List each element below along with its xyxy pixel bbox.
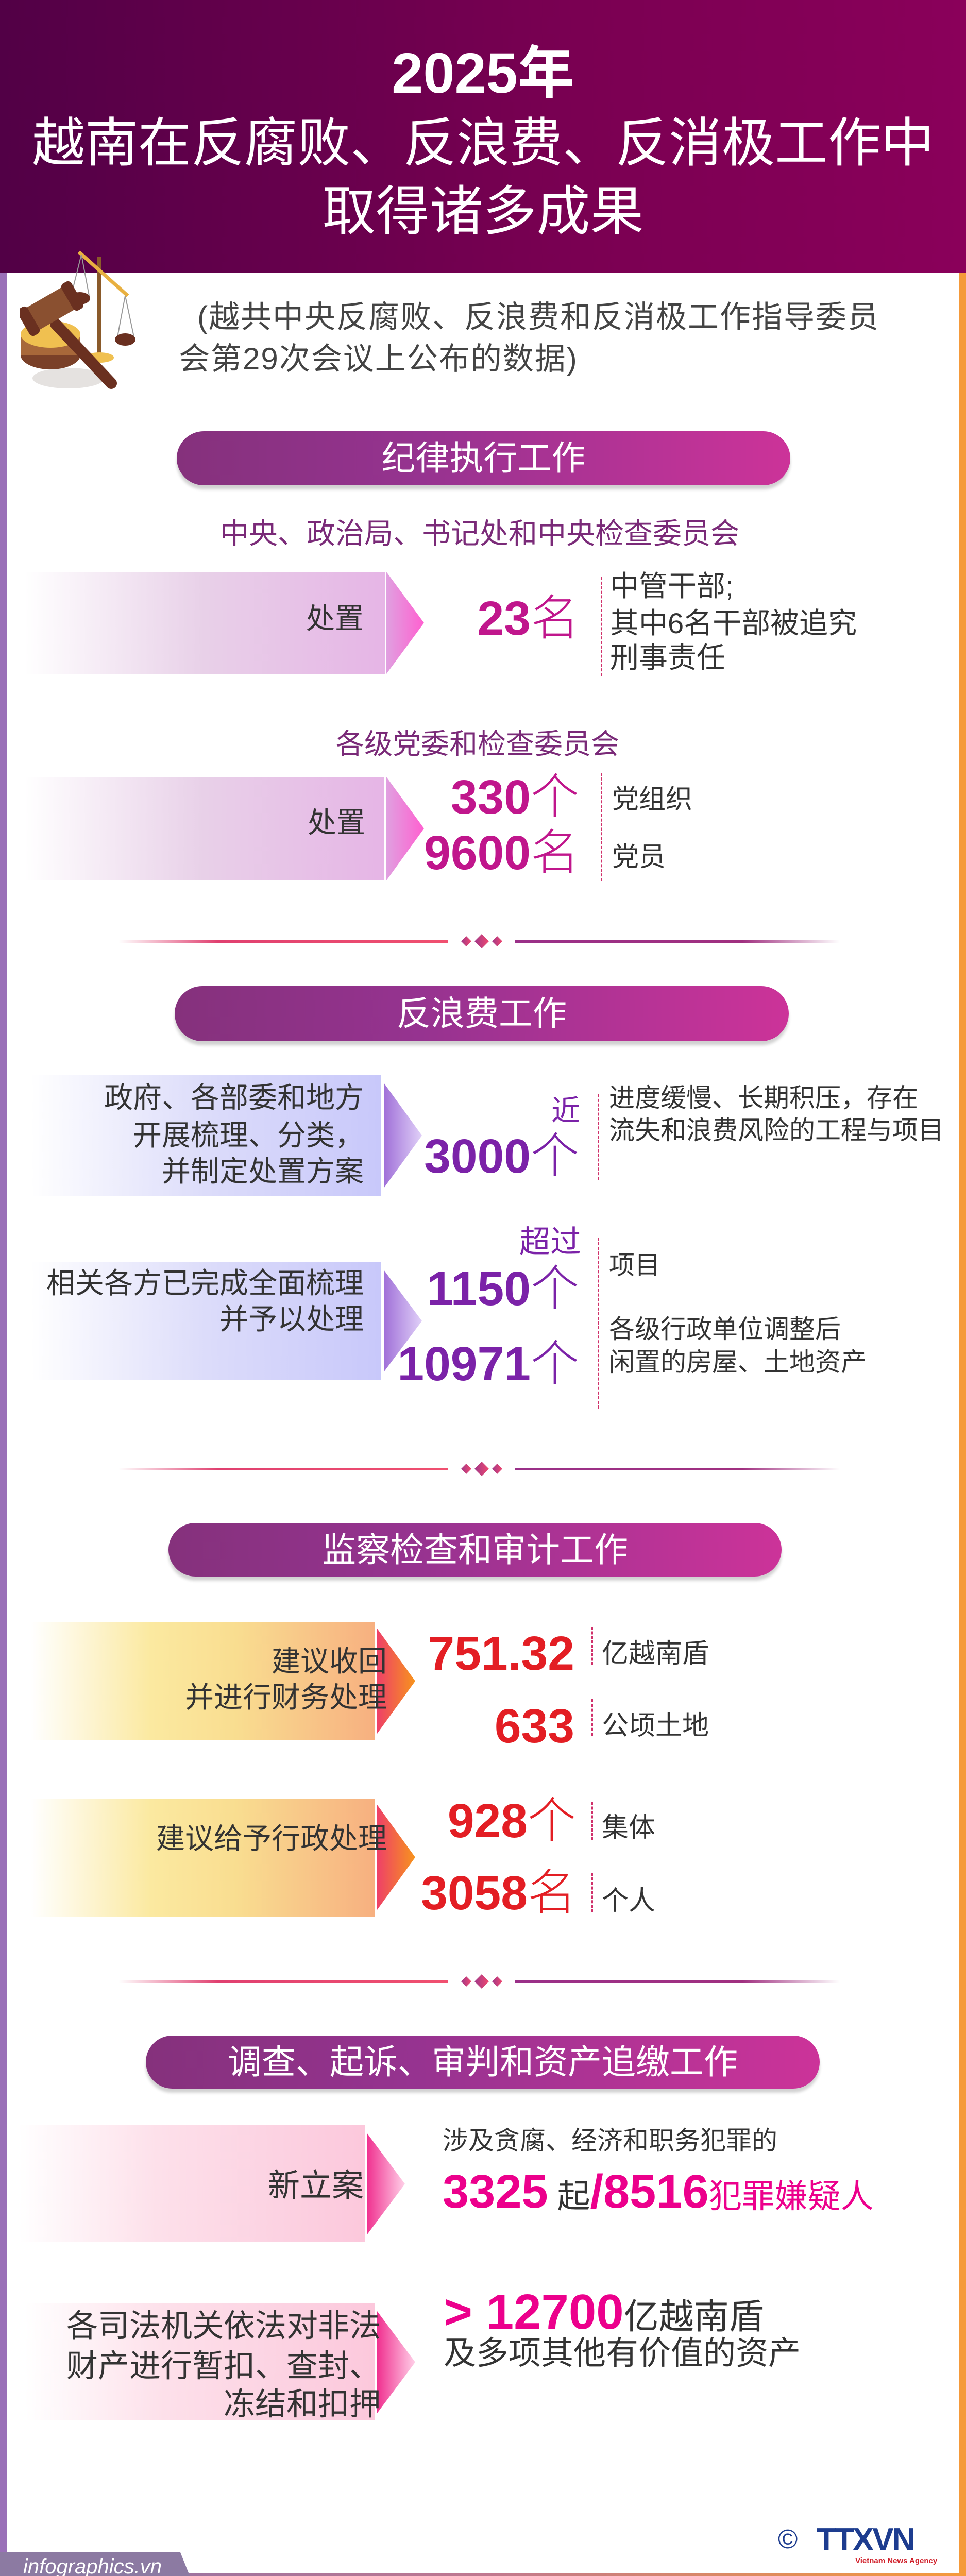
number 3000个: 3000个	[424, 1129, 579, 1183]
divider	[123, 1974, 836, 1989]
footer strip	[0, 2573, 966, 2576]
title line 1: 2025年	[392, 42, 574, 105]
panel: discipline row 1: 刑事责任	[610, 641, 725, 674]
panel: inspection row D: 建议给予行政处理	[156, 1822, 387, 1855]
panel: inspection row D: 个人	[602, 1886, 655, 1916]
logo: TTXVN	[778, 2522, 938, 2565]
logo: TTXVN: ©	[778, 2524, 798, 2554]
heading: 监察检查和审计工作: 监察检查和审计工作	[322, 1531, 628, 1569]
number 23名: 23名	[478, 591, 579, 645]
subtitle	[179, 300, 879, 376]
panel: asset seizure: 各司法机关依法对非法	[66, 2308, 381, 2343]
subheading: central level: 中央、政治局、书记处和中央检查委员会	[220, 517, 739, 550]
number 1150个: 1150个	[427, 1261, 579, 1315]
panel: new cases	[55, 2125, 874, 2242]
panel: waste row A: 近	[551, 1094, 580, 1127]
panel: inspection row D: 集体	[602, 1813, 655, 1843]
panel: asset seizure: 财产进行暂扣、查封、	[66, 2348, 381, 2383]
title line 2: 越南在反腐败、反浪费、反消极工作中	[32, 113, 934, 173]
subheading: all levels: 各级党委和检查委员会	[336, 728, 619, 760]
subtitle: (越共中央反腐败、反浪费和反消极工作指导委员	[197, 300, 879, 334]
number 9600名: 9600名	[424, 825, 579, 879]
panel: inspection row C: 亿越南盾	[602, 1639, 709, 1669]
panel: waste row A: 进度缓慢、长期积压，存在	[609, 1083, 918, 1112]
number >12700: > 12700亿越南盾	[444, 2284, 764, 2340]
divider	[123, 1462, 836, 1476]
panel: waste row A: 并制定处置方案	[162, 1155, 364, 1188]
panel: discipline row 2: 党员	[612, 842, 666, 872]
panel: waste row A	[72, 1075, 944, 1196]
panel: discipline row 1: 中管干部;	[610, 570, 734, 602]
right side bar	[959, 273, 966, 2576]
footer: infographics.vn	[0, 2552, 192, 2576]
panel: discipline row 2	[56, 770, 692, 881]
panel: waste row B: 相关各方已完成全面梳理	[46, 1267, 364, 1299]
panel: inspection row D	[41, 1793, 655, 1920]
panel: discipline row 2: 党组织	[612, 785, 692, 815]
panel: inspection row C: 公顷土地	[602, 1711, 709, 1741]
heading: 反浪费工作	[175, 986, 789, 1041]
logo: TTXVN: TTXVN	[817, 2522, 913, 2557]
heading: 调查、起诉、审判和资产追缴工作	[146, 2036, 820, 2089]
panel: waste row B: 超过	[519, 1225, 581, 1259]
number 3325/8516: 3325 起/8516犯罪嫌疑人	[443, 2165, 874, 2218]
number 10971个: 10971个	[397, 1336, 579, 1391]
number 633: 633	[495, 1699, 574, 1753]
subtitle: 会第29次会议上公布的数据)	[179, 342, 578, 376]
panel: asset seizure: 冻结和扣押	[224, 2386, 381, 2421]
title line 3: 取得诸多成果	[322, 182, 644, 242]
panel: waste row B: 各级行政单位调整后	[609, 1315, 841, 1344]
heading: 纪律执行工作: 纪律执行工作	[381, 439, 585, 477]
heading: 监察检查和审计工作	[168, 1523, 782, 1577]
panel: asset seizure: 及多项其他有价值的资产	[444, 2335, 801, 2371]
number 928个: 928个	[448, 1793, 576, 1848]
panel: waste row B	[46, 1225, 867, 1409]
panel: discipline row 2: 处置	[308, 806, 365, 839]
logo: TTXVN: Vietnam News Agency	[855, 2556, 937, 2565]
number 751.32: 751.32	[428, 1626, 574, 1680]
number 3058名: 3058名	[421, 1866, 576, 1920]
panel: asset seizure	[61, 2284, 801, 2421]
panel: waste row B: 并予以处理	[219, 1303, 364, 1335]
panel: inspection row C: 建议收回	[272, 1645, 387, 1677]
panel: waste row B: 闲置的房屋、土地资产	[609, 1348, 867, 1377]
left side bar	[0, 273, 7, 2576]
panel: inspection row C	[41, 1622, 709, 1753]
heading: 调查、起诉、审判和资产追缴工作: 调查、起诉、审判和资产追缴工作	[228, 2043, 738, 2081]
panel: waste row A: 开展梳理、分类，	[133, 1119, 364, 1151]
header banner	[0, 0, 966, 273]
heading: 纪律执行工作	[177, 431, 790, 485]
icon: gavel and scales	[20, 250, 135, 389]
heading: 反浪费工作: 反浪费工作	[397, 994, 567, 1032]
divider	[123, 934, 836, 948]
panel: new cases: 新立案	[268, 2168, 364, 2204]
panel: waste row A: 政府、各部委和地方	[104, 1081, 364, 1114]
panel: inspection row C: 并进行财务处理	[185, 1681, 387, 1714]
panel: discipline row 1	[56, 570, 857, 676]
panel: discipline row 1: 其中6名干部被追究	[610, 607, 857, 639]
panel: waste row A: 流失和浪费风险的工程与项目	[609, 1116, 944, 1145]
panel: waste row B: 项目	[609, 1251, 660, 1280]
number 330个: 330个	[451, 770, 579, 824]
panel: new cases: 涉及贪腐、经济和职务犯罪的	[443, 2126, 777, 2155]
panel: discipline row 1: 处置	[306, 602, 364, 635]
